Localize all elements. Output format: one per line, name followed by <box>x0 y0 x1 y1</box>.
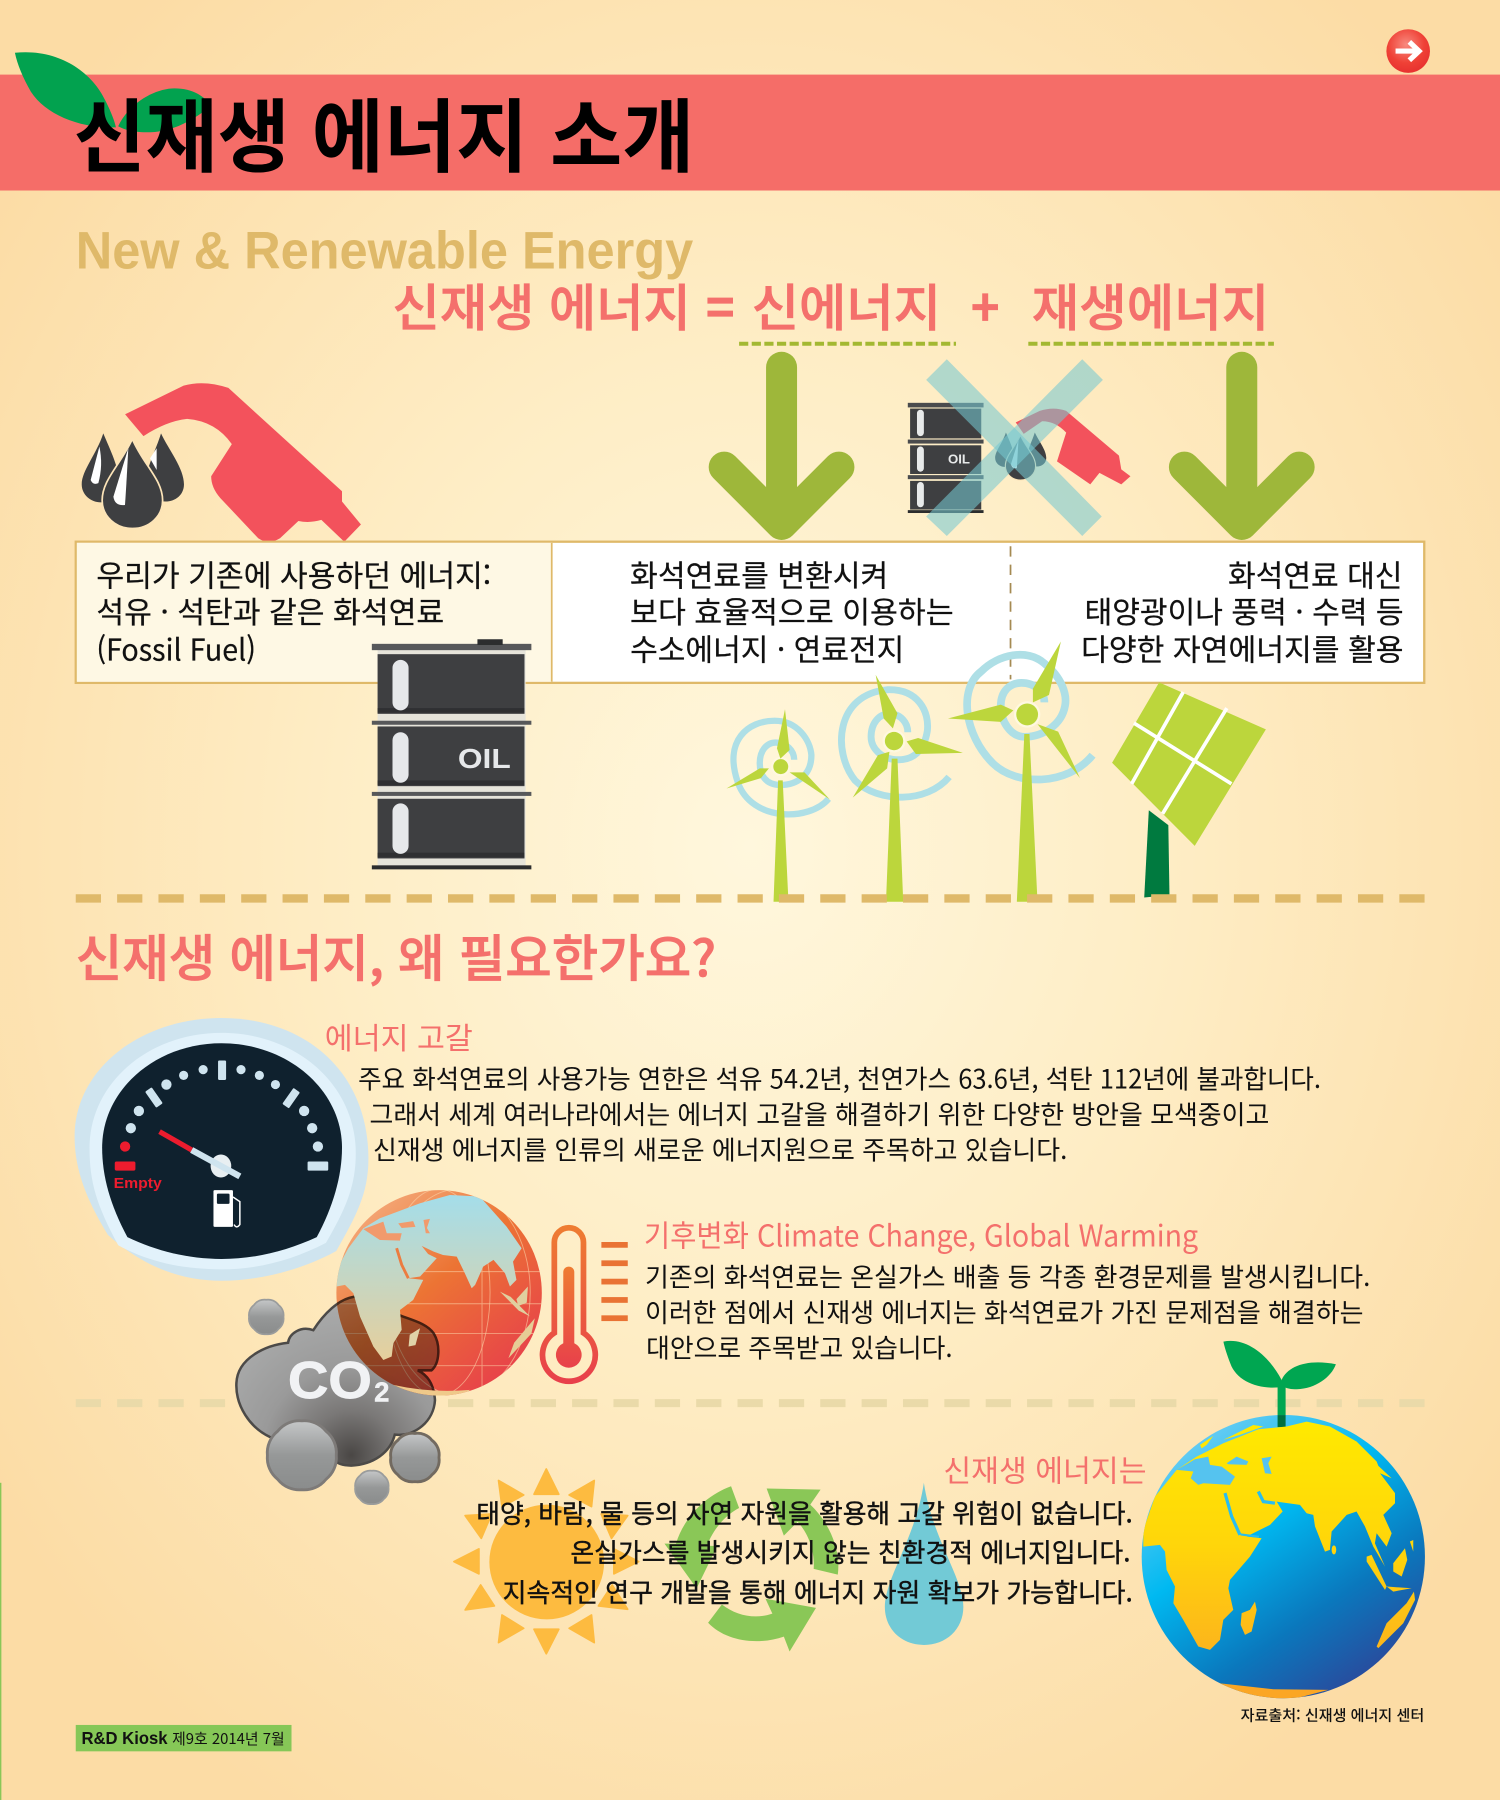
land <box>1143 1422 1415 1701</box>
text: renewable energy: 다양한 자연에너지를 활용 <box>1081 625 1404 669</box>
cloud overlap on globe <box>336 1296 440 1396</box>
sprout <box>1223 1341 1336 1428</box>
icon: oil barrel: OIL <box>458 743 511 774</box>
globe <box>1142 1415 1425 1698</box>
icon: green arrow left <box>724 367 839 524</box>
icon: water drop <box>885 1483 963 1645</box>
text block: renewable energy summary: 신재생 에너지는 <box>943 1447 1147 1491</box>
text: renewable energy: 태양광이나 풍력 · 수력 등 <box>1085 588 1404 632</box>
icon: fuel nozzle <box>125 383 361 542</box>
icon: oil drops <box>82 433 184 529</box>
text block: energy depletion: 주요 화석연료의 사용가능 연한은 석유 54.2년, 천연가스 63.6년, 석탄 112년에 불과합니다. <box>358 1058 1321 1097</box>
equation heading: 재생에너지 <box>1032 267 1269 341</box>
equation heading <box>393 267 1269 341</box>
globe land <box>337 1195 535 1400</box>
icon: wind turbine 1 <box>726 709 830 902</box>
header band <box>0 52 1500 191</box>
small barrel <box>908 403 984 513</box>
secondary divider <box>76 1400 1425 1407</box>
text block: renewable energy summary: 온실가스를 발생시키지 않는 친환경적 에너지입니다. <box>570 1531 1130 1570</box>
text block: energy depletion: 신재생 에너지를 인류의 새로운 에너지원으로 주목하고 있습니다. <box>373 1129 1067 1168</box>
equation heading: + <box>971 267 1000 341</box>
source note: 자료출처: 신재생 에너지 센터 <box>1241 1704 1424 1725</box>
icon: green arrow right <box>1184 367 1299 524</box>
icon: crossed out fossil fuel <box>908 359 1130 536</box>
text block: renewable energy summary <box>476 1447 1147 1610</box>
dashed underlines <box>739 342 1274 345</box>
text: renewable energy <box>1081 551 1404 669</box>
icon: oil barrel <box>372 639 531 869</box>
label: empty: Empty <box>114 1176 163 1192</box>
icon: warming earth and CO2 cloud <box>236 1189 544 1504</box>
text block: energy depletion <box>325 1014 1321 1168</box>
text: new energy: 수소에너지 · 연료전지 <box>630 625 904 669</box>
text block: climate change: 대안으로 주목받고 있습니다. <box>646 1327 953 1366</box>
equation heading: 신에너지 <box>752 267 941 341</box>
icon: next arrow button <box>1386 29 1430 73</box>
text block: energy depletion: 그래서 세계 여러나라에서는 에너지 고갈을 해결하기 위한 다양한 방안을 모색중이고 <box>370 1093 1269 1132</box>
icon: solar panel <box>1112 682 1266 897</box>
english subtitle: New & Renewable Energy <box>76 222 694 281</box>
text: fossil fuel: (Fossil Fuel) <box>96 625 256 669</box>
text block: climate change: 기존의 화석연료는 온실가스 배출 등 각종 환경문제를 발생시킵니다. <box>645 1256 1370 1295</box>
text: new energy: 보다 효율적으로 이용하는 <box>630 588 954 632</box>
text block: renewable energy summary: 태양, 바람, 물 등의 자연 자원을 활용해 고갈 위험이 없습니다. <box>476 1492 1133 1531</box>
footer badge <box>76 1725 292 1751</box>
fuel pump <box>213 1190 240 1227</box>
footer badge: R&D Kiosk <box>81 1728 168 1748</box>
globe grid <box>333 1189 544 1396</box>
small barrel: OIL <box>948 452 970 467</box>
text: fossil fuel <box>96 551 491 669</box>
title: 신재생 에너지 소개 <box>73 73 694 189</box>
text: new energy <box>630 551 954 669</box>
icon: healthy earth with sprout <box>1142 1341 1425 1701</box>
text: new energy: 화석연료를 변환시켜 <box>630 551 888 595</box>
CO2 cloud <box>236 1297 438 1466</box>
icon: sun <box>454 1469 639 1654</box>
small nozzle <box>1016 409 1130 484</box>
stem base <box>1278 1415 1286 1427</box>
text block: renewable energy summary: 지속적인 연구 개발을 통해 에너지 자원 확보가 가능합니다. <box>503 1571 1133 1610</box>
globe ocean <box>336 1190 542 1396</box>
text: renewable energy: 화석연료 대신 <box>1228 551 1402 595</box>
section divider <box>76 895 1425 902</box>
icon: fuel gauge <box>75 1018 368 1281</box>
text block: energy depletion: 에너지 고갈 <box>325 1014 473 1058</box>
label: CO2: CO <box>288 1351 372 1409</box>
text: fossil fuel: 석유 · 석탄과 같은 화석연료 <box>96 588 444 632</box>
section heading: 신재생 에너지, 왜 필요한가요? <box>76 918 716 992</box>
small drops <box>995 432 1046 480</box>
equation heading: 신재생 에너지 <box>393 267 691 341</box>
label: CO2: 2 <box>374 1377 389 1408</box>
icon: recycling arrows <box>664 1486 838 1651</box>
text block: climate change <box>644 1211 1370 1366</box>
panel: definition table <box>76 542 1424 683</box>
equation heading: = <box>706 267 735 341</box>
seas <box>1177 1457 1275 1537</box>
text: fossil fuel: 우리가 기존에 사용하던 에너지: <box>96 551 491 595</box>
icon: wind turbine 2 <box>841 675 963 902</box>
text block: climate change: 기후변화 Climate Change, Global Warming <box>644 1211 1198 1255</box>
footer badge: 제9호 2014년 7월 <box>172 1728 285 1749</box>
smoke puffs <box>249 1300 439 1504</box>
icon: leaves <box>15 52 211 132</box>
text block: climate change: 이러한 점에서 신재생 에너지는 화석연료가 가진 문제점을 해결하는 <box>645 1291 1363 1330</box>
icon: thermometer <box>543 1228 628 1381</box>
icon: wind turbine 3 <box>948 642 1093 902</box>
left edge green line <box>0 1483 1 1800</box>
cross <box>926 359 1103 536</box>
